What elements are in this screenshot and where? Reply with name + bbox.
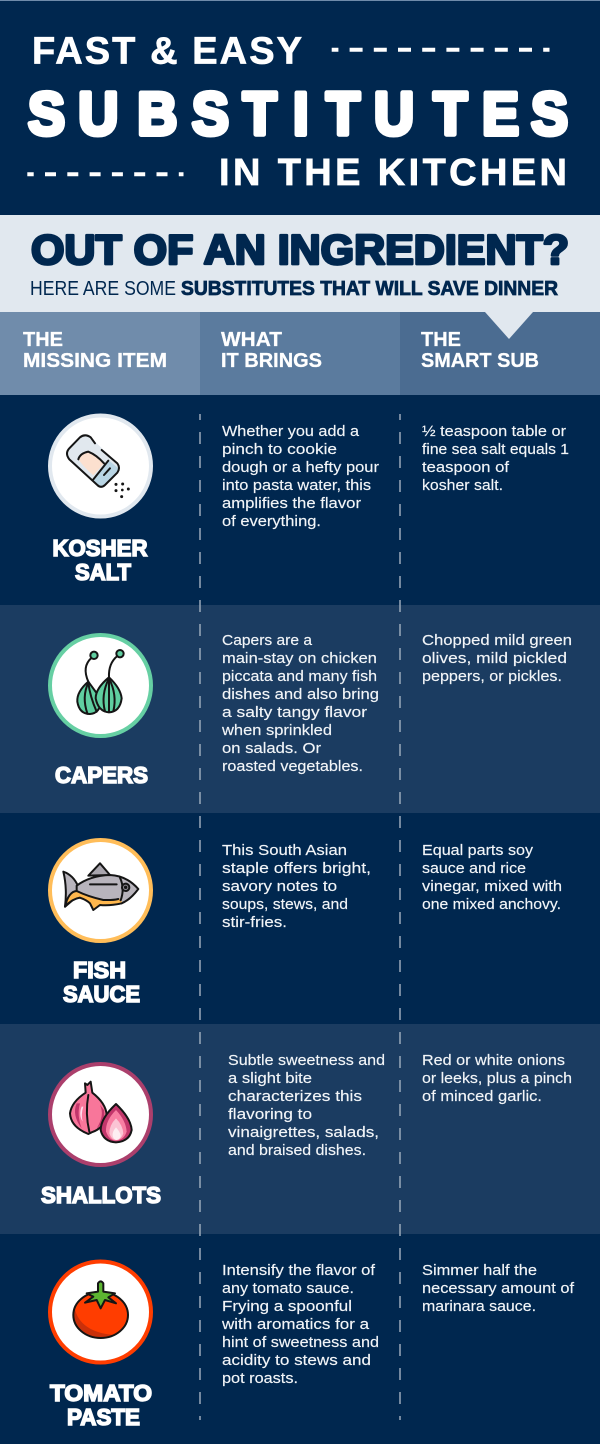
header: the smart sub (421, 328, 539, 372)
text: what it brings: This South Asian (222, 842, 347, 859)
text: what it brings: main-stay on chicken (222, 650, 377, 667)
text: what it brings: roasted vegetables. (222, 758, 363, 775)
text: smart sub: Simmer half the (422, 1262, 537, 1279)
text: what it brings: of everything. (222, 513, 321, 530)
text: smart sub: of minced garlic. (422, 1088, 542, 1105)
text: smart sub: vinegar, mixed with (422, 878, 562, 895)
text: what it brings: pot roasts. (222, 1370, 298, 1387)
text: what it brings: amplifies the flavor (222, 495, 361, 512)
text: what it brings: with aromatics for a (221, 1316, 370, 1333)
text: what it brings: into pasta water, this (222, 477, 371, 494)
text: what it brings: flavoring to (228, 1106, 312, 1123)
panel: row kosher salt (0, 395, 600, 605)
subheading (30, 278, 559, 300)
text: smart sub: kosher salt. (422, 477, 503, 494)
subheading: SUBSTITUTES THAT WILL SAVE DINNER (181, 278, 559, 300)
text: smart sub: ½ teaspoon table or (422, 423, 566, 440)
label: tomato paste: TOMATO (50, 1380, 152, 1406)
text: what it brings (221, 632, 379, 775)
heading: out of an ingredient: OUT OF AN INGREDIENT? (31, 226, 569, 273)
text: what it brings: Capers are a (222, 632, 313, 649)
label: kosher salt (52, 535, 148, 585)
label: tomato paste (50, 1380, 152, 1430)
text: smart sub (422, 1052, 572, 1105)
text: what it brings (221, 1262, 379, 1387)
text: smart sub (422, 842, 562, 913)
icon: shallots (50, 1064, 151, 1165)
icon: salt shaker (50, 416, 151, 516)
arrow: pointer (485, 312, 533, 339)
text: what it brings: hint of sweetness and (222, 1334, 379, 1351)
header: what it brings: WHAT (221, 328, 282, 351)
panel: column headers (0, 312, 600, 395)
text: what it brings (228, 1052, 385, 1159)
text: smart sub: marinara sauce. (422, 1298, 536, 1315)
panel: intro band (0, 215, 600, 312)
text: smart sub: Equal parts soy (422, 842, 534, 859)
text: smart sub: Red or white onions (422, 1052, 565, 1069)
text: what it brings: any tomato sauce. (222, 1280, 354, 1297)
heading: in the kitchen: IN THE KITCHEN (219, 152, 567, 194)
text: what it brings: acidity to stews and (222, 1352, 371, 1369)
text: what it brings: soups, stews, and (222, 896, 348, 913)
text: smart sub: sauce and rice (422, 860, 526, 877)
panel: row tomato paste (0, 1234, 600, 1444)
text: smart sub: one mixed anchovy. (422, 896, 561, 913)
text: what it brings: staple offers bright, (222, 860, 371, 877)
panel: row capers (0, 605, 600, 813)
text: what it brings: a salty tangy flavor (222, 704, 367, 721)
text: smart sub (422, 1262, 575, 1315)
header: the smart sub: THE (421, 328, 461, 351)
text: what it brings: when sprinkled (221, 722, 332, 739)
header: the missing item: MISSING ITEM (23, 349, 167, 372)
text: what it brings: pinch to cookie (222, 441, 337, 458)
label: kosher salt: SALT (75, 559, 131, 585)
icon: fish (50, 840, 151, 941)
text: what it brings: savory notes to (222, 878, 337, 895)
text: what it brings: characterizes this (228, 1088, 362, 1105)
text: smart sub: teaspoon of (422, 459, 510, 476)
text: what it brings: and braised dishes. (228, 1142, 366, 1159)
text: smart sub: peppers, or pickles. (422, 668, 562, 685)
text: what it brings: dough or a hefty pour (222, 459, 379, 476)
icon: tomato (50, 1262, 151, 1362)
text: what it brings: Intensify the flavor of (222, 1262, 376, 1279)
text: what it brings: dishes and also bring (222, 686, 379, 703)
label: fish sauce: SAUCE (63, 981, 140, 1007)
header: the smart sub: SMART SUB (421, 349, 539, 372)
label: kosher salt: KOSHER (52, 535, 148, 561)
text: smart sub: fine sea salt equals 1 (422, 441, 569, 458)
text: smart sub: Chopped mild green (422, 632, 572, 649)
panel: row fish sauce (0, 813, 600, 1024)
text: smart sub: necessary amount of (422, 1280, 575, 1297)
text: what it brings: Whether you add a (222, 423, 360, 440)
header: the missing item (23, 328, 167, 372)
heading: fast and easy: FAST & EASY (32, 30, 302, 72)
panel: row shallots (0, 1024, 600, 1234)
label: capers: CAPERS (55, 762, 148, 788)
text: smart sub (422, 423, 569, 494)
text: what it brings (222, 423, 379, 530)
header: what it brings: IT BRINGS (221, 349, 322, 372)
text: smart sub (422, 632, 572, 685)
text: what it brings (222, 842, 371, 931)
subheading: HERE ARE SOME (30, 278, 176, 300)
text: what it brings: Subtle sweetness and (228, 1052, 385, 1069)
text: what it brings: stir-fries. (222, 914, 287, 931)
text: smart sub: or leeks, plus a pinch (422, 1070, 572, 1087)
label: fish sauce (63, 957, 140, 1007)
heading: substitutes: SUBSTITUTES (28, 81, 568, 148)
header: the missing item: THE (23, 328, 63, 351)
panel: title banner (0, 0, 600, 215)
label: fish sauce: FISH (73, 957, 126, 983)
text: what it brings: on salads. Or (222, 740, 321, 757)
text: what it brings: piccata and many fish (222, 668, 377, 685)
label: shallots: SHALLOTS (41, 1182, 161, 1208)
text: what it brings: vinaigrettes, salads, (228, 1124, 379, 1141)
header: what it brings (221, 328, 322, 372)
text: what it brings: Frying a spoonful (222, 1298, 352, 1315)
text: smart sub: olives, mild pickled (422, 650, 567, 667)
label: tomato paste: PASTE (67, 1404, 140, 1430)
text: what it brings: a slight bite (228, 1070, 312, 1087)
icon: capers (50, 635, 151, 736)
